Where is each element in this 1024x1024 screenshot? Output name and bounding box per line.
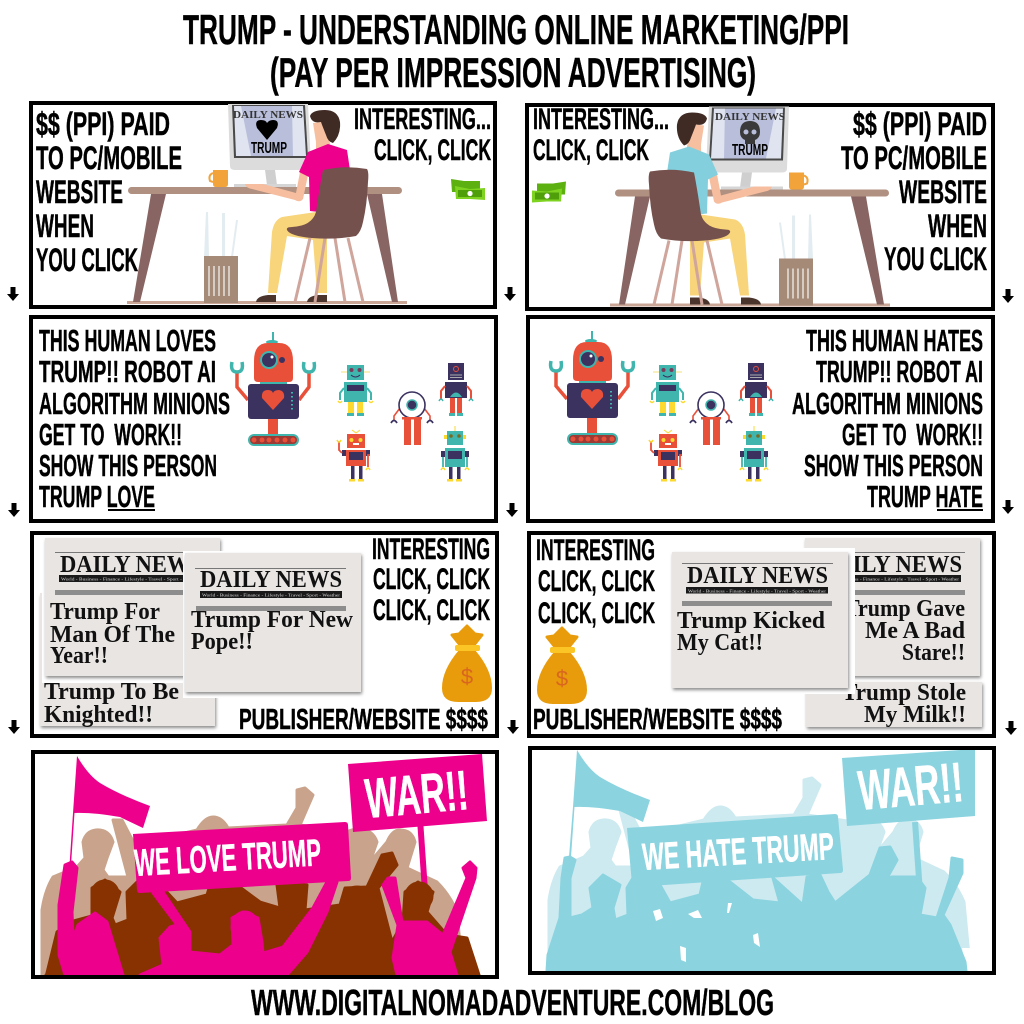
newspaper: Trump For Man Of The Year: Trump For <box>50 599 160 625</box>
sign: We Hate Trump: WE HATE TRUMP <box>641 826 835 879</box>
newspaper: Trump Gave Me A Bad Stare <box>805 538 981 678</box>
icons: robot minions <box>649 363 773 482</box>
newspaper: Trump Kicked My Cat: Trump Kicked <box>677 608 826 634</box>
panel: crowd, hate side <box>530 748 994 973</box>
newspaper: Trump Gave Me A Bad Stare: DAILY NEWS <box>820 552 962 578</box>
newspaper: Trump Gave Me A Bad Stare: Stare!! <box>902 640 965 666</box>
newspaper: Trump For Man Of The Year <box>42 538 226 683</box>
text: human loves Trump: ALGORITHM MINIONS <box>39 386 230 421</box>
text: PPI paid when you click: WEBSITE <box>36 174 123 210</box>
text: interesting click click <box>533 103 669 167</box>
newspaper: Trump Stole My Milk <box>806 680 983 729</box>
newspaper: Trump Stole My Milk: My Milk!! <box>864 702 966 728</box>
flag <box>70 756 150 865</box>
text: interesting clicks: CLICK, CLICK <box>538 597 655 630</box>
panel: clicks, love side <box>31 103 495 307</box>
monitor screen: skull Trump news: TRUMP <box>732 142 768 159</box>
text: interesting click click <box>354 103 491 167</box>
text: human loves Trump <box>39 323 230 514</box>
text: interesting clicks: CLICK, CLICK <box>373 594 490 627</box>
newspaper: Trump For New Pope: DAILY NEWS <box>200 567 342 593</box>
sign: War: WAR!! <box>363 758 471 830</box>
newspaper: Trump Gave Me A Bad Stare: World - Business - Finance - Lifestyle - Travel - Sport - Weather <box>822 576 960 582</box>
newspaper: Trump For Man Of The Year: Year!! <box>50 643 108 669</box>
illustration: person at desk in blue shirt <box>532 106 890 306</box>
newspaper: Trump Gave Me A Bad Stare: Trump Gave <box>845 596 965 622</box>
text: human loves Trump: THIS HUMAN LOVES <box>39 323 216 358</box>
title <box>183 6 849 96</box>
sign: We Love Trump: WE LOVE TRUMP <box>133 832 322 885</box>
text: interesting clicks: INTERESTING <box>372 533 490 566</box>
text: human loves Trump: TRUMP!! ROBOT AI <box>39 354 216 389</box>
text: PPI paid when you click <box>36 106 182 278</box>
back row trim at lower right <box>958 948 975 971</box>
newspaper: Trump For New Pope <box>183 551 365 698</box>
newspaper: Trump To Be Knighted: Knighted!! <box>44 702 153 728</box>
panel: crowd, love side <box>33 752 497 977</box>
text: human hates Trump <box>792 323 983 514</box>
newspaper: Trump For New Pope: Trump For New <box>191 607 354 633</box>
panel: robots, hate side <box>528 317 993 521</box>
text: human loves Trump: TRUMP LOVE <box>39 479 155 514</box>
monitor screen: heart Trump news: TRUMP <box>251 140 287 157</box>
text: interesting clicks: CLICK, CLICK <box>538 565 655 598</box>
sign: We Hate Trump <box>627 814 843 887</box>
crowd: middle row silhouettes <box>46 853 479 977</box>
icon: heart robot leader <box>551 331 633 445</box>
crowd: back row silhouettes <box>549 778 970 967</box>
crowd: back row silhouettes <box>42 788 463 977</box>
newspaper: Trump Kicked My Cat: My Cat!! <box>677 630 763 656</box>
monitor screen: skull Trump news: DAILY NEWS <box>715 111 785 123</box>
text: PPI paid when you click: WHEN <box>36 208 94 244</box>
crowd: front silhouettes <box>547 847 966 971</box>
newspaper: Trump Stole My Milk: Trump Stole <box>842 680 966 706</box>
sign: War <box>348 754 487 885</box>
illustration: person at desk in pink shirt <box>127 104 485 304</box>
sign: War: WAR!! <box>856 750 966 822</box>
panel: robots, love side <box>31 317 496 521</box>
text: interesting clicks <box>372 533 490 627</box>
text: interesting clicks <box>536 534 655 630</box>
newspaper: Trump Kicked My Cat <box>672 548 855 694</box>
text: interesting clicks: INTERESTING <box>536 534 655 567</box>
monitor screen: heart Trump news: DAILY NEWS <box>233 109 303 121</box>
flag <box>569 750 650 857</box>
icon: money bag <box>442 626 492 702</box>
text: interesting click click: CLICK, CLICK <box>374 134 491 167</box>
newspaper: Trump Kicked My Cat: DAILY NEWS <box>687 563 828 589</box>
icons: robot minions <box>337 363 473 482</box>
text: interesting click click: INTERESTING... <box>533 103 669 136</box>
monitor screen: skull Trump news <box>715 111 785 159</box>
newspaper: Trump To Be Knighted <box>40 593 216 728</box>
newspaper: Trump For New Pope: Pope!! <box>191 629 253 655</box>
text: PPI paid when you click: TO PC/MOBILE <box>36 140 182 176</box>
sign: War <box>842 749 975 882</box>
text: interesting click click: INTERESTING... <box>354 103 491 136</box>
icon: heart robot leader <box>232 332 314 446</box>
newspaper: Trump To Be Knighted: Trump To Be <box>44 679 179 705</box>
newspaper: Trump Kicked My Cat: World - Business - Finance - Lifestyle - Travel - Sport - Weather <box>688 588 827 594</box>
text: human loves Trump: GET TO WORK!! <box>39 417 182 452</box>
panel: clicks, hate side <box>527 103 993 309</box>
newspaper: Trump For Man Of The Year: DAILY NEWS <box>60 552 202 578</box>
title: (PAY PER IMPRESSION ADVERTISING) <box>270 49 756 96</box>
text: PPI paid when you click: $$ (PPI) PAID <box>36 106 170 142</box>
sign: We Love Trump <box>133 822 351 893</box>
text: PPI paid when you click <box>841 106 987 277</box>
text: publisher earnings: PUBLISHER/WEBSITE $$$$ <box>533 704 782 736</box>
newspaper: Trump For Man Of The Year: World - Business - Finance - Lifestyle - Travel - Sport - Weather <box>61 576 202 582</box>
text: interesting clicks: CLICK, CLICK <box>373 563 490 596</box>
text: PPI paid when you click: YOU CLICK <box>36 242 138 278</box>
panel: newspapers, hate side <box>529 533 994 736</box>
newspaper: Trump For Man Of The Year: Man Of The <box>50 622 175 648</box>
panel: newspapers, love side <box>32 533 497 736</box>
monitor screen: heart Trump news <box>233 109 303 157</box>
arrows between rows <box>7 287 1017 735</box>
text: interesting click click: CLICK, CLICK <box>533 134 649 167</box>
crowd: front row pink silhouettes <box>59 862 476 975</box>
text: PPI paid when you click: WHEN <box>928 208 987 244</box>
newspaper: Trump For New Pope: World - Business - Finance - Lifestyle - Travel - Sport - Weather <box>202 592 341 598</box>
icon: money bag <box>537 628 587 704</box>
newspaper: Trump Gave Me A Bad Stare: Me A Bad <box>865 618 966 644</box>
text: human loves Trump: SHOW THIS PERSON <box>39 448 217 483</box>
text: publisher earnings: PUBLISHER/WEBSITE $$$$ <box>239 704 488 736</box>
